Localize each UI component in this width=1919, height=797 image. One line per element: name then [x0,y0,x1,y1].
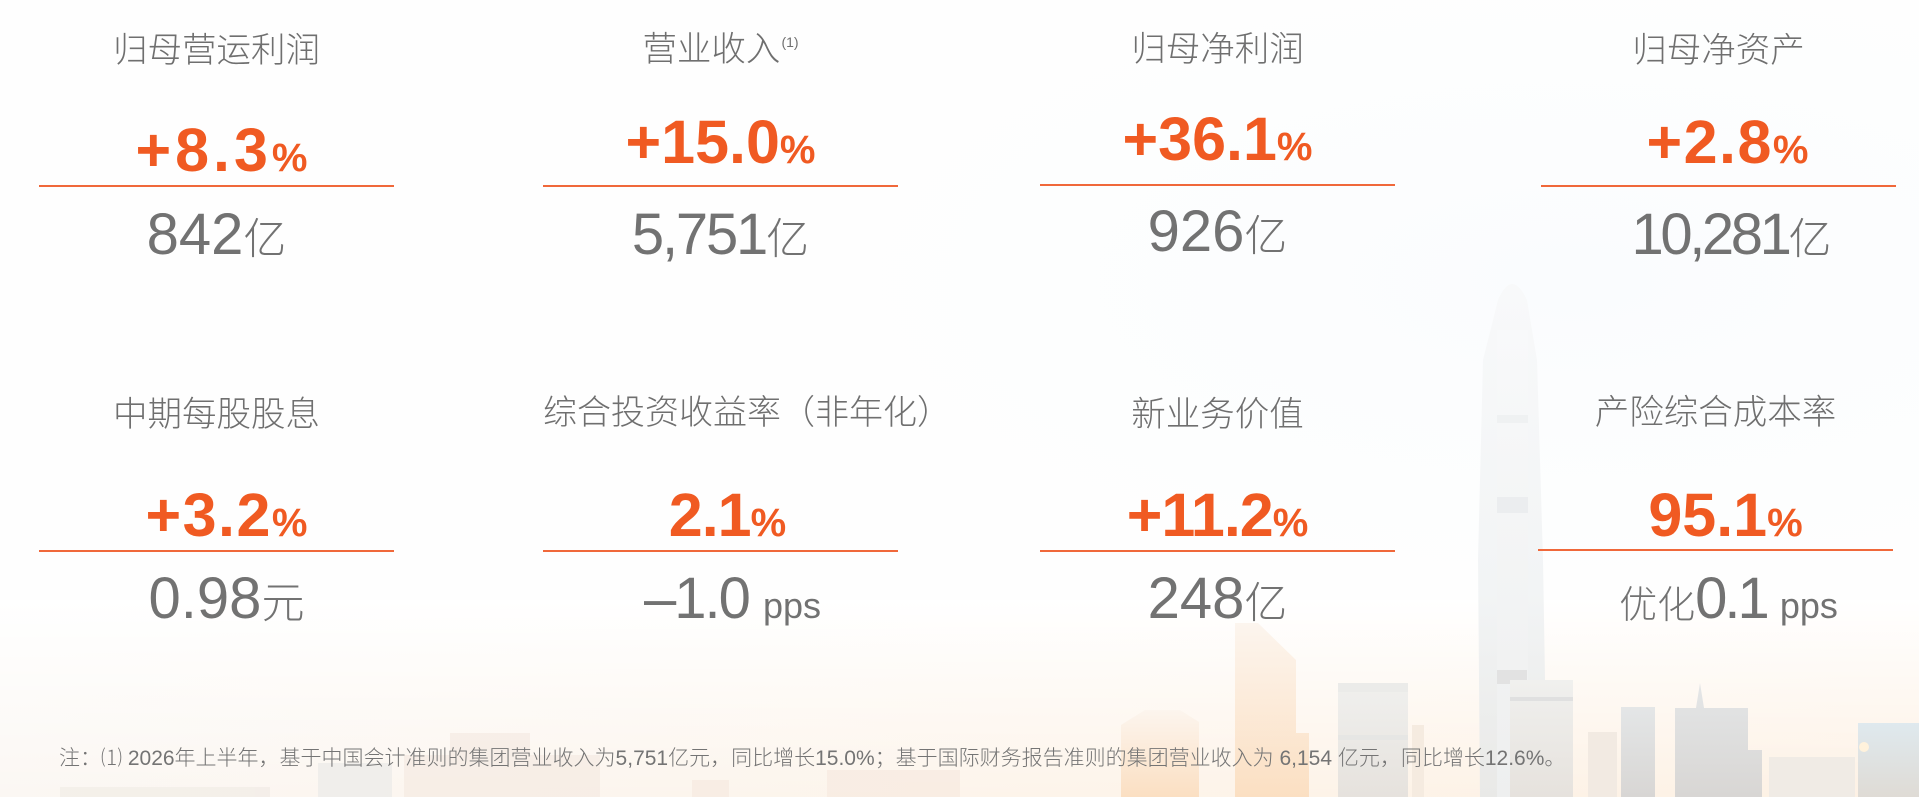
growth figure: +11.2% [1127,481,1308,549]
absolute value: 0.98元 [149,566,304,631]
growth figure: 95.1% [1648,481,1803,549]
metric title: 营业收入(1) [642,31,799,69]
growth figure: +3.2% [146,481,308,549]
metric: 产险综合成本率 [1538,394,1893,631]
metric: 营业收入 [543,31,898,267]
absolute value: 842亿 [147,202,286,267]
absolute value: 926亿 [1148,199,1287,264]
growth figure: 2.1% [669,481,786,549]
divider line [1040,550,1395,552]
metric: 综合投资收益率（非年化） [543,394,951,631]
metric: 归母营运利润 [39,32,394,267]
growth figure: +8.3% [136,116,308,184]
metric title: 产险综合成本率 [1595,394,1836,432]
growth figure: +15.0% [626,108,815,176]
metric title: 归母净资产 [1632,32,1805,70]
footnote: 注：⑴ 2026年上半年，基于中国会计准则的集团营业收入为5,751亿元，同比增长15.0%；基于国际财务报告准则的集团营业收入为 6,154 亿元，同比增长12.6%。 [59,747,1565,770]
absolute value: 5,751亿 [632,202,809,267]
metric: 归母净利润 [1040,31,1395,264]
growth figure: +2.8% [1646,108,1808,176]
divider line [1538,549,1893,551]
divider line [543,550,898,552]
divider line [1040,184,1395,186]
divider line [1541,185,1896,187]
metric: 归母净资产 [1541,32,1896,267]
metric title: 新业务价值 [1131,396,1304,434]
divider line [543,185,898,187]
growth figure: +36.1% [1123,105,1312,173]
metric: 中期每股股息 [39,396,394,631]
divider line [39,550,394,552]
absolute value: 10,281亿 [1632,202,1832,267]
metric title: 综合投资收益率（非年化） [543,394,951,432]
metric title: 中期每股股息 [113,396,320,434]
metric title: 归母营运利润 [113,32,320,70]
metric title: 归母净利润 [1131,31,1304,69]
absolute value: 优化0.1 pps [1619,566,1838,631]
absolute value: –1.0 pps [644,566,821,631]
absolute value: 248亿 [1148,566,1287,631]
divider line [39,185,394,187]
metric: 新业务价值 [1040,396,1395,631]
